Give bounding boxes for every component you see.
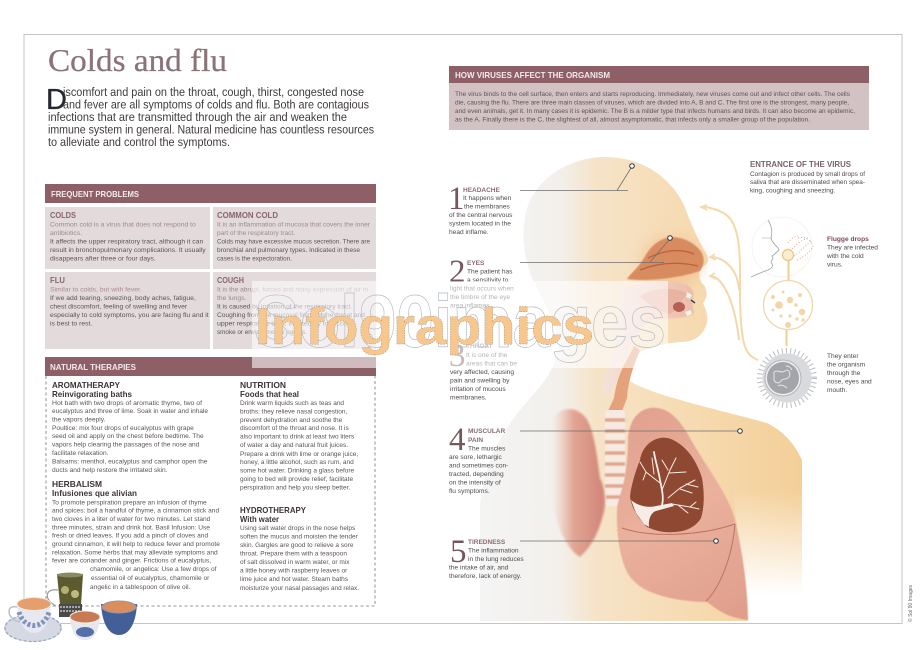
nutrition: perspiration and help you sleep better. xyxy=(240,484,350,492)
card: flu: If we add tearing, sneezing, body aches, fatigue, xyxy=(50,295,196,302)
label: flugge drops xyxy=(826,236,878,268)
intro paragraph: immune system in general. Natural medicine has countless resources xyxy=(48,122,374,136)
symptom 2: eyes: area inflames. xyxy=(450,302,492,310)
symptom 3: throat: THROAT xyxy=(466,343,493,350)
nutrition: NUTRITION xyxy=(240,380,286,390)
right lung xyxy=(617,408,748,620)
label: virus entry: nose, eyes and xyxy=(827,378,872,386)
nutrition: also important to drink at least two liters xyxy=(240,434,355,440)
herbalism: essential oil of eucalyptus, chamomile or xyxy=(91,575,210,582)
hydrotherapy: With water xyxy=(240,514,280,524)
aromatherapy: Hot bath with two drops of aromatic thyme, two of xyxy=(52,400,202,407)
intro paragraph: infections that are transmitted through the air and weaken the xyxy=(48,110,347,124)
symptom 5: tiredness: TIREDNESS xyxy=(468,539,506,546)
herbalism: relaxation. Some herbs that may alleviate symptoms and xyxy=(52,550,218,556)
card: flu: chest discomfort, feeling of swelling and fever xyxy=(50,304,188,310)
hydrotherapy: Using salt water drops in the nose helps xyxy=(240,525,356,532)
card: colds: It affects the upper respiratory tract, although it can xyxy=(50,238,203,246)
symptom 1: headache: 1 xyxy=(448,181,464,217)
lower right fade xyxy=(733,490,810,621)
symptom 3: throat: very affected, causing xyxy=(450,369,514,376)
aromatherapy: Poultice: mix four drops of eucalyptus with grape xyxy=(52,425,194,432)
symptom 1: headache: the membranes xyxy=(464,204,511,210)
viruses heading: HOW VIRUSES AFFECT THE ORGANISM xyxy=(455,70,610,80)
card: common cold: bronchial and pulmonary types. Indicated in these xyxy=(217,247,360,254)
nutrition: prevent dehydration and soothe the xyxy=(240,417,343,424)
hydrotherapy: soften the mucus and moisten the tender xyxy=(240,534,359,540)
symptom 4: muscular pain: The muscles xyxy=(468,446,506,452)
herbalism: Infusiones que alivian xyxy=(52,488,137,498)
arrows: entry paths of the virus xyxy=(701,205,758,360)
card: flu: is best to rest. xyxy=(50,320,92,328)
mouth and pharynx xyxy=(602,282,695,395)
aromatherapy: ducts and help restore the irritated skin. xyxy=(52,467,168,474)
body silhouette xyxy=(480,157,802,621)
nutrition: some hot water. Drinking a glass before xyxy=(240,468,355,474)
symptom 4: muscular pain xyxy=(449,422,508,495)
natural therapies heading xyxy=(45,357,376,376)
hydrotherapy: lime juice and hot water. Steam baths xyxy=(240,576,349,583)
viruses body text: and even animals, get it. In many cases it is epidemic. The B is a milder type that infects humans and birds. It can also become an epidemic, xyxy=(455,108,855,115)
viruses body text: The virus binds to the cell surface, then enters and starts reproducing. Immediately, new viruses come out and infect other cells. The cells xyxy=(455,91,851,98)
card: colds xyxy=(45,207,210,269)
herbalism: fever are coriander and ginger. Frictions of eucalyptus, xyxy=(52,558,211,564)
nose warm shading xyxy=(642,236,702,288)
symptom 2: eyes: The patient has xyxy=(467,268,513,276)
intro paragraph: iscomfort and pain on the throat, cough, thirst, congested nose xyxy=(63,85,364,99)
blue teacup xyxy=(101,601,137,635)
panel: how viruses affect the organism xyxy=(449,66,869,130)
label: virus entry: through the xyxy=(827,370,861,377)
label: virus entry xyxy=(827,353,872,394)
card: cough: It is caused by irritation of the respiratory tract. xyxy=(217,304,352,310)
label: flugge drops: They are infected xyxy=(827,244,878,252)
symptom 3: throat: areas that can be xyxy=(466,360,517,368)
aromatherapy: seed oil and apply on the chest before bedtime. The xyxy=(52,433,204,440)
small teacup xyxy=(70,611,100,640)
trachea rings xyxy=(605,410,625,506)
label: flugge drops: with the cold xyxy=(826,253,864,260)
card: common cold: part of the respiratory tract. xyxy=(217,230,295,237)
card: flu: especially to cold symptoms, you are facing flu and it xyxy=(50,312,209,319)
hydrotherapy: of salt dissolved in warm water, or mix xyxy=(240,559,350,566)
illustration: tea cups xyxy=(4,572,137,642)
card: flu: FLU xyxy=(50,276,65,285)
frequent problems heading xyxy=(45,184,376,203)
symptom 2: eyes: light that occurs when xyxy=(450,286,514,292)
callout lines and markers xyxy=(520,164,742,543)
symptom 4: muscular pain: MUSCULAR xyxy=(468,428,505,435)
aromatherapy: vapors help clearing the passages of the nose and xyxy=(52,442,200,448)
watermark band xyxy=(252,281,668,368)
card: cough: upper respiratory tract, irritated by tobacco xyxy=(217,320,347,328)
symptom 1: headache: HEADACHE xyxy=(463,187,500,194)
card: common cold xyxy=(213,207,376,269)
aromatherapy: the vapors deeply. xyxy=(52,416,106,424)
symptom 2: eyes: 2 xyxy=(449,254,466,290)
card: common cold: cases is the expectoration. xyxy=(217,256,292,262)
symptom 2: eyes: a sensitivity to xyxy=(467,277,509,284)
symptom 4: muscular pain: PAIN xyxy=(468,437,483,444)
nutrition: Prepare a drink with lime or orange juice, xyxy=(240,451,358,458)
natural therapies heading: NATURAL THERAPIES xyxy=(50,362,136,372)
headline: entrance of the virus xyxy=(750,160,865,194)
card: colds: antibiotics. xyxy=(50,230,82,237)
symptom 4: muscular pain: 4 xyxy=(449,422,466,458)
dashed panel border xyxy=(46,376,375,606)
nutrition: Drink warm liquids such as teas and xyxy=(240,400,344,407)
panel: frequent problems xyxy=(45,184,376,349)
icon: magnified droplets xyxy=(764,280,812,330)
card: cough: smoke or environmental agents. xyxy=(217,329,307,336)
connector line to droplet circle xyxy=(786,261,788,346)
nutrition: going to bed will provide relief, facilitate xyxy=(240,476,353,483)
label: flugge drops: virus. xyxy=(827,262,843,268)
intro paragraph: and fever are all symptoms of colds and flu. Both are contagious xyxy=(63,98,369,112)
herbalism: HERBALISM xyxy=(52,479,102,489)
symptom 3: throat: pain and swelling by xyxy=(450,378,510,384)
lung cutaway tissue xyxy=(630,438,704,532)
hydrotherapy: a little honey with raspberry leaves or xyxy=(240,568,348,574)
aromatherapy: eucalyptus and three of lime. Soak in water and inhale xyxy=(52,408,208,415)
panel: natural therapies xyxy=(45,357,376,606)
symptom 1: headache xyxy=(448,181,513,236)
herbalism: To promote perspiration prepare an infusion of thyme xyxy=(52,500,207,506)
viruses body text xyxy=(455,91,855,124)
hydrotherapy: skin. Gargles are good to relieve a sore xyxy=(240,542,354,549)
esophagus tube xyxy=(608,346,640,411)
aromatherapy: facilitate relaxation. xyxy=(52,450,109,457)
label: virus entry: mouth. xyxy=(827,387,847,394)
symptom 2: eyes xyxy=(449,254,514,310)
watermark xyxy=(252,280,668,368)
nutrition: discomfort of the throat and nose. It is xyxy=(240,425,350,432)
herbalism: two cloves in a liter of water for two minutes. Let stand xyxy=(52,516,211,523)
card: flu xyxy=(45,272,210,349)
card: colds: COLDS xyxy=(50,211,77,220)
aromatherapy: Balsams: menthol, eucalyptus and camphor open the xyxy=(52,458,208,466)
symptom 4: muscular pain: flu symptoms. xyxy=(449,488,490,495)
viruses heading xyxy=(449,66,869,83)
nasal cavity xyxy=(627,237,704,280)
symptom 5: tiredness: therefore, lack of energy. xyxy=(449,573,522,580)
symptom 3: throat: 3 xyxy=(449,338,466,374)
symptom 3: throat xyxy=(449,338,517,402)
intro paragraph: to alleviate and control the symptoms. xyxy=(48,135,230,149)
symptom 4: muscular pain: and sometimes con- xyxy=(449,462,508,470)
symptom 4: muscular pain: tracted, depending xyxy=(449,471,504,478)
viruses body text: as the A. Finally there is the C, the slightest of all, almost asymptomatic, that infects only a smaller group of the population. xyxy=(455,116,810,124)
symptom 3: throat: irritation of mucous xyxy=(450,386,506,393)
symptom 3: throat: It is one of the xyxy=(466,352,508,359)
hydrotherapy: moisturize your nasal passages and relax. xyxy=(240,585,359,592)
watermark outline text: Sol90images xyxy=(254,280,666,363)
nutrition: Foods that heal xyxy=(240,389,299,399)
aromatherapy: Reinvigorating baths xyxy=(52,389,132,399)
saucer and teacup xyxy=(4,598,62,642)
headline: entrance of the virus: king, coughing and sneezing. xyxy=(750,188,836,194)
nutrition: broths: they relieve nasal congestion, xyxy=(240,408,348,416)
card: common cold: Colds may have excessive mucus secretion. There are xyxy=(217,238,370,246)
symptom 5: tiredness: in the lung reduces xyxy=(468,556,524,563)
symptom 1: headache: of the central nervous xyxy=(449,212,513,219)
symptom 1: headache: system located in the xyxy=(449,220,511,228)
hydrotherapy xyxy=(240,505,359,592)
watermark filled text: Infographics xyxy=(255,298,594,356)
card: cough: COUGH xyxy=(217,276,244,285)
card: common cold: It is an inflammation of mucosa that covers the inner xyxy=(217,222,371,228)
symptom 5: tiredness: 5 xyxy=(450,534,466,570)
symptom 4: muscular pain: are sore, lethargic xyxy=(449,454,502,461)
symptom 2: eyes: the timbre of the eye xyxy=(450,294,510,301)
label: flugge drops: Flugge drops xyxy=(827,236,869,243)
card: cough: It is the abrupt, forced and noisy expression of air in xyxy=(217,286,368,294)
herbalism: three minutes, strain and drink hot. Basil Infusion: Use xyxy=(52,524,210,532)
headline: entrance of the virus: saliva that are disseminated when spea- xyxy=(750,179,865,186)
herbalism xyxy=(52,479,220,591)
nutrition xyxy=(240,380,358,492)
card: cough xyxy=(213,272,376,349)
icon: face sneezing droplets xyxy=(751,217,813,277)
aromatherapy xyxy=(52,380,208,474)
hydrotherapy: throat. Prepare them with a teaspoon xyxy=(240,550,347,558)
card: cough: the lungs. xyxy=(217,295,247,302)
headline: entrance of the virus: ENTRANCE OF THE VIRUS xyxy=(750,160,852,169)
card: common cold: COMMON COLD xyxy=(217,211,278,220)
bronchial tree xyxy=(631,452,699,527)
viruses body text: die, causing the flu. There are three main classes of viruses, which are divided into A, B and C. The first one is the strongest, many people, xyxy=(455,100,849,106)
card: colds: disappears after three or four days. xyxy=(50,256,156,262)
card: colds: result in bronchopulmonary complications. It usually xyxy=(50,247,206,254)
nutrition: of water a day and natural fruit juices. xyxy=(240,442,348,449)
symptom 2: eyes: EYES xyxy=(467,260,485,267)
hydrotherapy: HYDROTHERAPY xyxy=(240,505,306,515)
headline: entrance of the virus: Contagion is produced by small drops of xyxy=(750,171,865,178)
label: virus entry: They enter xyxy=(827,353,859,360)
symptom 4: muscular pain: on the intensity of xyxy=(449,480,501,486)
card: flu: Similar to colds, but with fever. xyxy=(50,286,142,294)
frequent problems heading: FREQUENT PROBLEMS xyxy=(51,189,139,199)
herbalism: fresh or dried leaves. If you add a pinch of cloves and xyxy=(52,532,208,540)
symptom 1: headache: It happens when xyxy=(463,195,512,202)
herbalism: angelic in a tablespoon of olive oil. xyxy=(90,584,191,591)
intro paragraph xyxy=(46,84,374,149)
copyright note: © Sol 90 Images xyxy=(907,584,914,622)
glass of herbal tea xyxy=(47,572,83,617)
nutrition: honey, a little alcohol, such as rum, and xyxy=(240,459,354,466)
illustration: human head and torso anatomy xyxy=(480,157,810,621)
symptom 3: throat: membranes. xyxy=(450,394,487,402)
left lung xyxy=(552,409,605,557)
herbalism: ground cinnamon, it will help to reduce fever and promote xyxy=(52,541,220,548)
symptom 1: headache: head inflame. xyxy=(449,229,489,236)
drop cap: D xyxy=(46,84,67,116)
symptom 5: tiredness xyxy=(449,534,524,580)
icon: virus particle xyxy=(760,351,814,405)
herbalism: chamomile, or angelica: Use a few drops of xyxy=(90,566,217,573)
herbalism: and spices: boil a handful of thyme, a cinnamon stick and xyxy=(52,508,219,514)
label: virus entry: the organism xyxy=(827,362,866,368)
symptom 5: tiredness: the intake of air, and xyxy=(449,564,509,572)
card: cough: Coughing from the mucosal lining of the throat and xyxy=(217,312,365,319)
aromatherapy: AROMATHERAPY xyxy=(52,380,120,390)
title: Colds and flu xyxy=(48,42,227,78)
card: colds: Common cold is a virus that does not respond to xyxy=(50,222,196,228)
symptom 5: tiredness: The inflammation xyxy=(468,548,519,554)
